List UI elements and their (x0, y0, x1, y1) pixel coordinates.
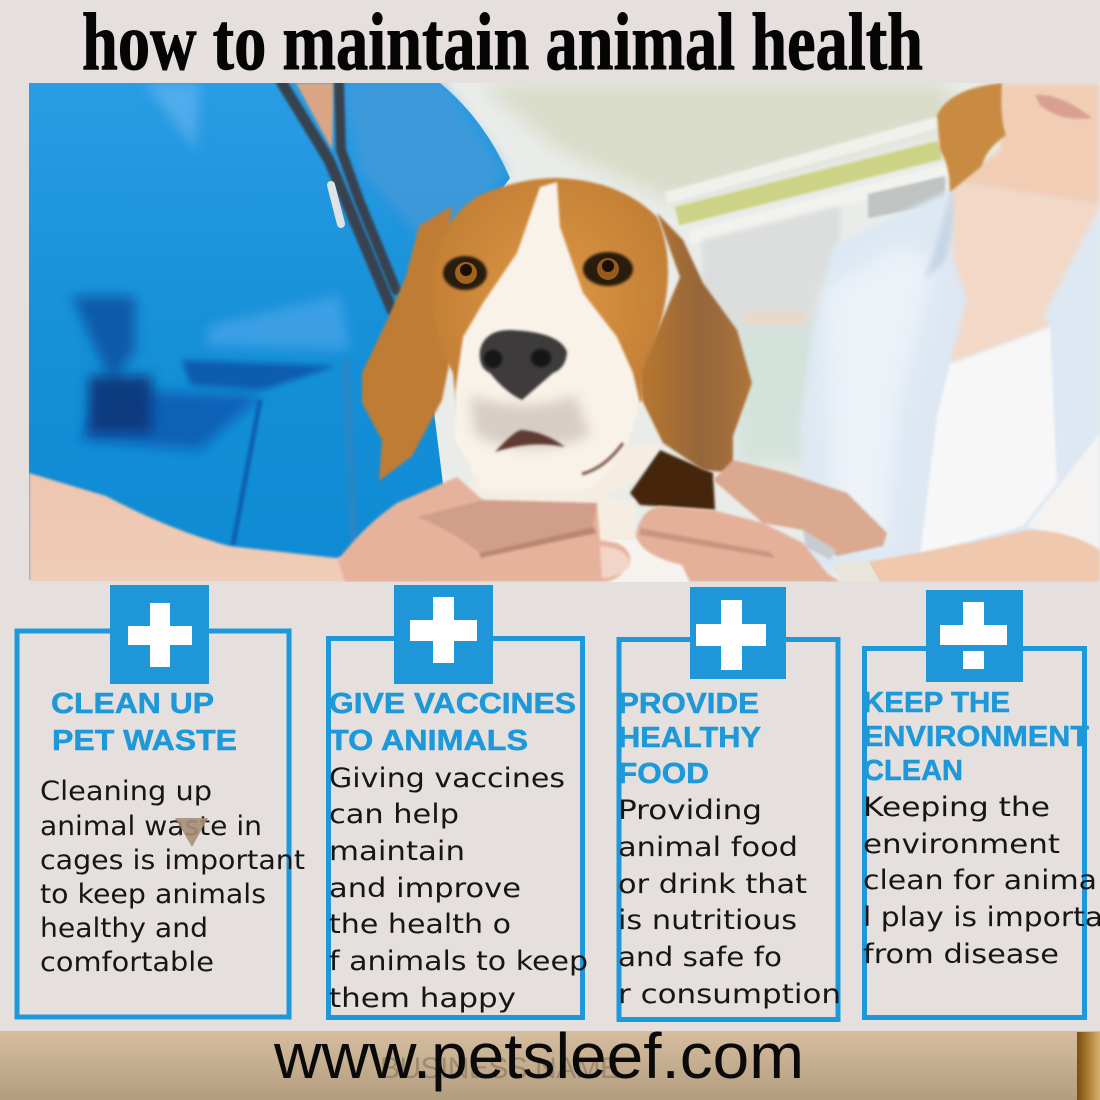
card 4 heading: KEEP THE (863, 687, 1010, 719)
card 4 body text: clean for anima (863, 865, 1097, 896)
card 3 heading (618, 688, 761, 790)
card 4 heading (863, 687, 1089, 787)
dog: muzzle shading (470, 395, 590, 448)
card 1 body text: cages is important (40, 845, 305, 876)
owner: forearm and bracelet (830, 530, 1100, 582)
card 1 body text: comfortable (40, 947, 214, 978)
dog: eyes (443, 252, 633, 290)
card 1 heading: CLEAN UP (51, 688, 214, 720)
card 4 body text: environment (863, 829, 1060, 860)
owner: right hand and watch (636, 460, 887, 582)
card 4: keep the environment clean (863, 590, 1100, 1018)
vet: blue scrubs with folds (29, 83, 510, 580)
card 1 body text: Cleaning up (40, 776, 212, 807)
card 3 body text: or drink that (618, 869, 807, 900)
card 3: provide healthy food (618, 587, 841, 1020)
card 3 body text: is nutritious (618, 905, 797, 936)
card 1 body text: healthy and (40, 913, 208, 944)
stethoscope (282, 83, 396, 310)
card 3 body text (618, 795, 841, 1010)
card 3 heading: HEALTHY (618, 722, 761, 754)
card 3 icon: medical cross (690, 587, 786, 679)
faded placeholder text: BUSINESS NAME (380, 1052, 620, 1085)
gold edge (1077, 1032, 1100, 1100)
card 2 icon: medical cross (394, 585, 493, 684)
card 4 body text: Keeping the (863, 792, 1050, 823)
photo: vet and owner holding a beagle (29, 83, 1100, 582)
card 1 frame (17, 631, 289, 1017)
dog: dark chest (630, 450, 715, 510)
card 1 heading (51, 688, 237, 757)
card 1 icon: medical cross (110, 585, 209, 684)
card 2 body text: maintain (329, 836, 465, 867)
footer band (0, 1020, 1100, 1100)
dog: white neck and chest (470, 443, 690, 582)
dog: nose (480, 330, 567, 400)
card 2 body text (329, 763, 588, 1014)
clinic background (434, 83, 1100, 582)
card 1 heading: PET WASTE (52, 725, 237, 757)
dog: mouth (495, 430, 623, 474)
card 2 body text: Giving vaccines (329, 763, 565, 794)
card 2 heading: TO ANIMALS (329, 725, 528, 757)
card 2 body text: f animals to keep (329, 946, 588, 977)
dog: left ear (362, 206, 452, 481)
website address: www.petsleef.com (273, 1020, 804, 1092)
card 4 icon: medical cross (926, 590, 1023, 682)
card 3 body text: animal food (618, 832, 798, 863)
card 4 body text (863, 792, 1100, 970)
card 2 heading: GIVE VACCINES (329, 688, 576, 720)
card 2: give vaccines to animals (328, 585, 588, 1018)
card 4 heading: CLEAN (863, 755, 963, 787)
card 2 body text: them happy (329, 983, 516, 1014)
card 4 body text: l play is importa (863, 902, 1100, 933)
card 3 body text: and safe fo (618, 942, 782, 973)
card 3 body text: Providing (618, 795, 762, 826)
card 4 frame (864, 648, 1084, 1018)
card 4 heading: ENVIRONMENT (863, 721, 1089, 753)
card 3 heading: PROVIDE (618, 688, 759, 720)
card 3 frame (619, 640, 838, 1020)
vet: forearm (29, 473, 420, 582)
card 2 body text: can help (329, 799, 459, 830)
card 1 body text: to keep animals (40, 879, 266, 910)
card 1 body text: animal waste in (40, 811, 262, 842)
card 1: clean up pet waste (17, 585, 305, 1017)
vet: left hand (338, 477, 630, 582)
vet: neck (296, 83, 334, 150)
card 3 body text: r consumption (618, 979, 841, 1010)
card 1 body text (40, 776, 305, 978)
card 2 frame (328, 638, 582, 1018)
woman: shirt, t-shirt, neck and face (800, 83, 1100, 582)
card 2 heading (329, 688, 576, 757)
dog: head (436, 176, 670, 412)
card 4 body text: from disease (863, 939, 1059, 970)
card 3 heading: FOOD (618, 758, 709, 790)
dog: right ear (640, 213, 752, 473)
dog: white blaze and muzzle (455, 182, 640, 490)
card 2 body text: the health o (329, 909, 511, 940)
card 2 body text: and improve (329, 873, 521, 904)
stray triangle mark (175, 818, 208, 847)
